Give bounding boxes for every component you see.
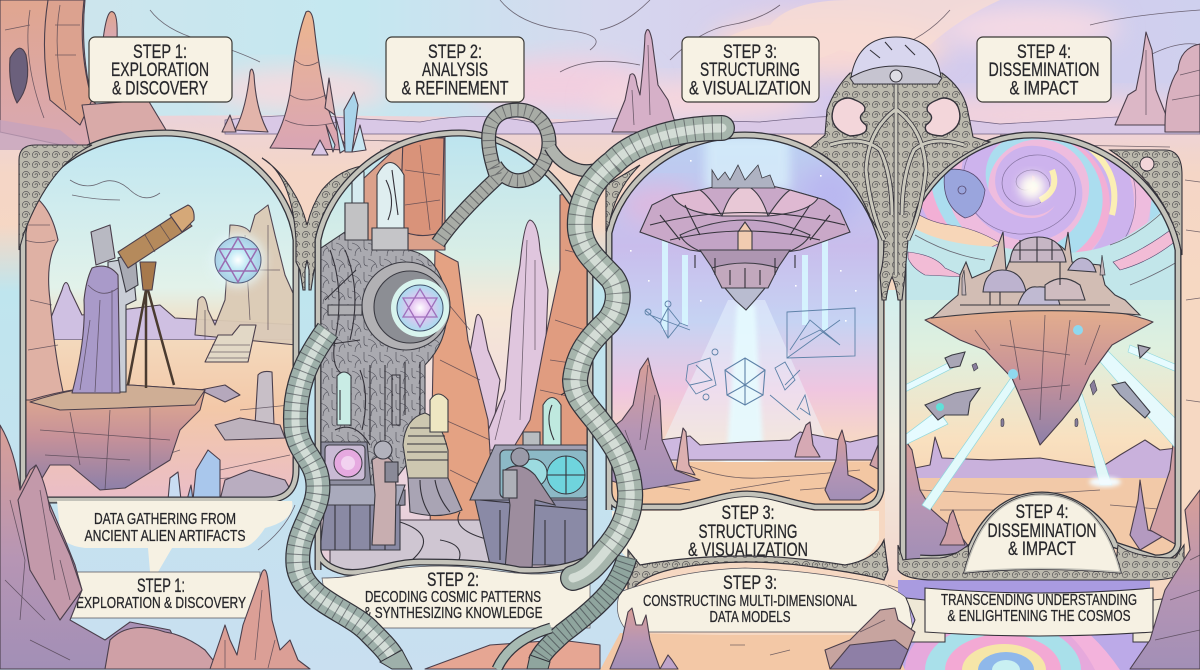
astronaut left — [372, 456, 396, 545]
bottom swirl below panel 4 — [898, 580, 1150, 670]
spacecraft — [925, 388, 980, 420]
caption text: ANCIENT ALIEN ARTIFACTS — [84, 528, 246, 545]
right console — [470, 445, 590, 500]
top label: step 1: EXPLORATION — [111, 60, 209, 81]
floating island — [925, 309, 1153, 445]
main big hose — [573, 128, 722, 578]
bottom-centre desert and rocks — [425, 608, 915, 670]
top label: step 4: STEP 4: — [1017, 42, 1071, 63]
caption 2: DECODING COSMIC PATTERNS — [365, 589, 541, 606]
caption 3 upper: STRUCTURING — [698, 522, 798, 543]
caption 3 ornament band — [628, 540, 888, 595]
astronaut right — [505, 466, 555, 570]
right side spires and cliff — [612, 30, 1200, 132]
frame 4 — [903, 135, 1182, 560]
frame 1 — [19, 133, 296, 500]
loop hose — [438, 110, 600, 243]
desert mountains and spires — [660, 432, 880, 460]
left hose — [295, 330, 412, 669]
frame 3 — [606, 135, 881, 510]
desert spires and crystal cluster — [222, 11, 366, 155]
caption text — [84, 511, 246, 545]
frames: arched ornate borders — [19, 133, 1182, 572]
top label: step 3: STRUCTURING — [700, 60, 800, 81]
side beams — [662, 240, 828, 330]
hoses — [295, 110, 722, 669]
caption 2: & SYNTHESIZING KNOWLEDGE — [364, 605, 542, 622]
caption 4: dome: DISSEMINATION — [988, 521, 1096, 542]
caption 1b: step 1 banner — [58, 572, 260, 618]
robed figure — [108, 258, 136, 392]
lower hose behind — [497, 557, 627, 669]
caption text: DATA GATHERING FROM — [94, 511, 236, 528]
caption 4: dome: STEP 4: — [1016, 502, 1068, 523]
rock debris — [972, 363, 1097, 427]
caption 3 upper — [612, 497, 879, 567]
left console — [320, 442, 405, 510]
caption 3 lower banner: STEP 3: — [723, 573, 777, 594]
top label: step 4: DISSEMINATION — [988, 60, 1100, 81]
light beams — [922, 378, 1015, 510]
stars — [630, 160, 857, 322]
panel 4 scene: galaxy and floating city — [906, 138, 1174, 559]
panel 3 scene: mothership projecting data models — [605, 130, 885, 510]
caption 3 lower banner — [617, 568, 914, 635]
caption 2: STEP 2: — [427, 570, 479, 591]
caption 4: scroll banner: & ENLIGHTENING THE COSMOS — [948, 608, 1130, 625]
caption 2 — [322, 565, 590, 628]
top label: step 1 — [89, 37, 232, 102]
desert and mountains — [905, 437, 1177, 480]
machine body — [318, 162, 450, 520]
wireframe data models — [645, 301, 855, 420]
frame 2 — [318, 133, 590, 572]
bottom-left rocks — [0, 425, 310, 669]
top label: step 1: STEP 1: — [133, 42, 187, 63]
top label: step 2: STEP 2: — [428, 42, 482, 63]
caption 1: data gathering — [57, 501, 295, 572]
caption 4: scroll banner — [906, 588, 1172, 642]
top label: step 2 — [386, 37, 524, 102]
bottom-right rocks — [1130, 490, 1200, 669]
top label: step 3: & VISUALIZATION — [689, 78, 811, 100]
panel 2 scene: laboratory machine in canyon — [315, 130, 593, 575]
top label: step 1: & DISCOVERY — [112, 78, 208, 100]
lower sky — [906, 213, 1174, 300]
shoulder between panels 1 and 2 — [262, 158, 368, 290]
gear drum and drapes — [403, 413, 462, 516]
caption 4: dome — [898, 495, 1184, 580]
orb — [211, 233, 265, 287]
top-left canyon rock formation — [0, 0, 166, 150]
glass tubes — [337, 372, 351, 425]
central ornate tower with dome between panels 3 and 4 — [810, 37, 990, 300]
caption 4: dome: & IMPACT — [1008, 539, 1076, 560]
top label: step 4: & IMPACT — [1010, 78, 1079, 100]
telescope — [118, 213, 192, 268]
floor cables — [400, 512, 484, 560]
crystals — [193, 450, 220, 500]
top label: step 2: ANALYSIS — [422, 60, 488, 81]
peach band under swirl — [915, 214, 999, 247]
caption 3 upper: STEP 3: — [722, 503, 774, 524]
caption 1b: step 1 banner: EXPLORATION & DISCOVERY — [76, 595, 246, 612]
domed city — [932, 232, 1140, 318]
top label: step 2: & REFINEMENT — [402, 78, 509, 100]
top label: step 3: STEP 3: — [723, 42, 777, 63]
caption 1b: step 1 banner: STEP 1: — [137, 576, 185, 597]
floating cliff platform — [23, 385, 205, 490]
caption 4: scroll banner: TRANSCENDING UNDERSTANDING — [941, 592, 1137, 609]
top label: step 3 — [682, 37, 819, 102]
tripod — [128, 290, 174, 388]
caption 3 lower banner: CONSTRUCTING MULTI-DIMENSIONAL — [643, 593, 857, 610]
caption 3 lower banner: DATA MODELS — [710, 609, 790, 626]
top label: step 4 — [977, 37, 1111, 102]
ruins — [195, 205, 296, 345]
ship body — [640, 165, 850, 310]
panel 1 scene: observer with telescope — [20, 130, 300, 505]
caption 3 upper: & VISUALIZATION — [688, 540, 808, 561]
